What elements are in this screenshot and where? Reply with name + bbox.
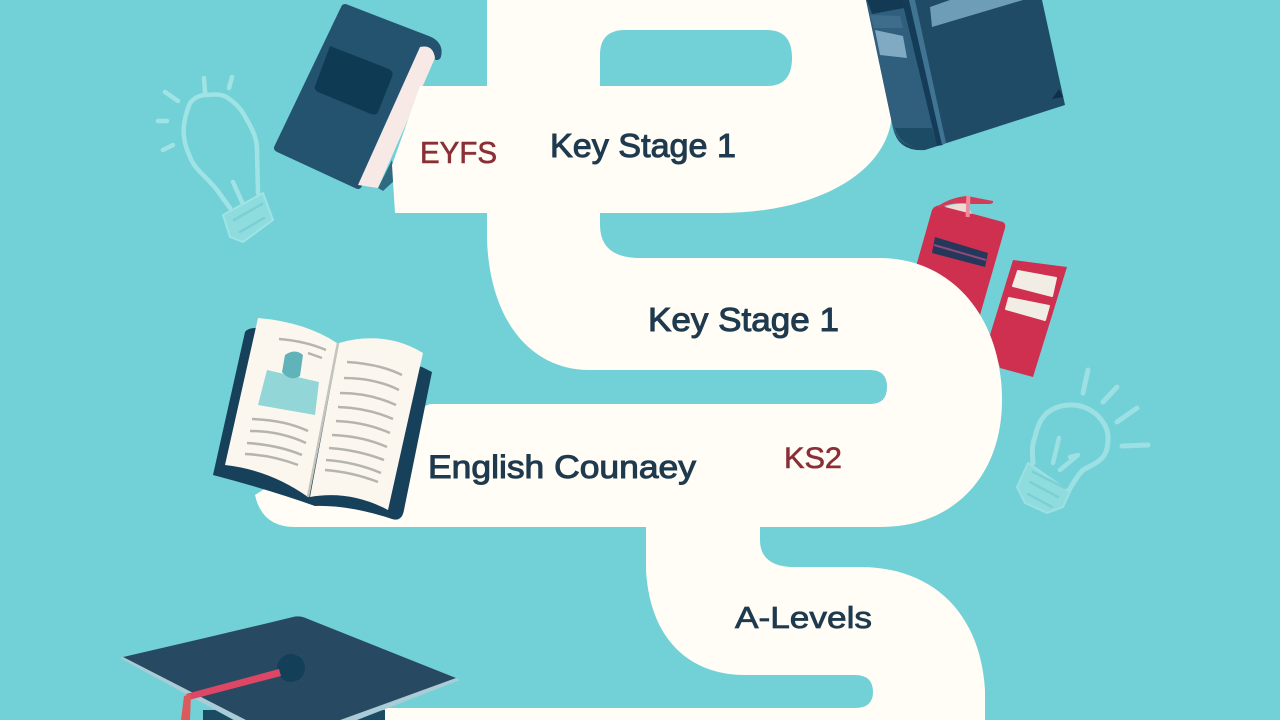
label: English Journey: English Counaey <box>428 449 696 485</box>
label: KS2: KS2 <box>784 442 842 475</box>
icon: light bulb left <box>158 77 273 242</box>
icon: graduation cap <box>120 616 460 720</box>
icon: navy book top left <box>278 8 438 191</box>
icon: light bulb right <box>1017 370 1148 513</box>
icon: open book <box>213 318 432 520</box>
winding cream path <box>255 0 1002 720</box>
label: Key Stage 1 top: Key Stage 1 <box>550 127 736 164</box>
icon: red book upper <box>915 196 1005 315</box>
label: EYFS: EYFS <box>420 135 497 170</box>
label: A-Levels: A-Levels <box>735 600 872 635</box>
icon: red book lower <box>990 260 1067 377</box>
icon: navy book top right <box>866 0 1065 150</box>
label: Key Stage 1 middle: Key Stage 1 <box>648 301 839 338</box>
